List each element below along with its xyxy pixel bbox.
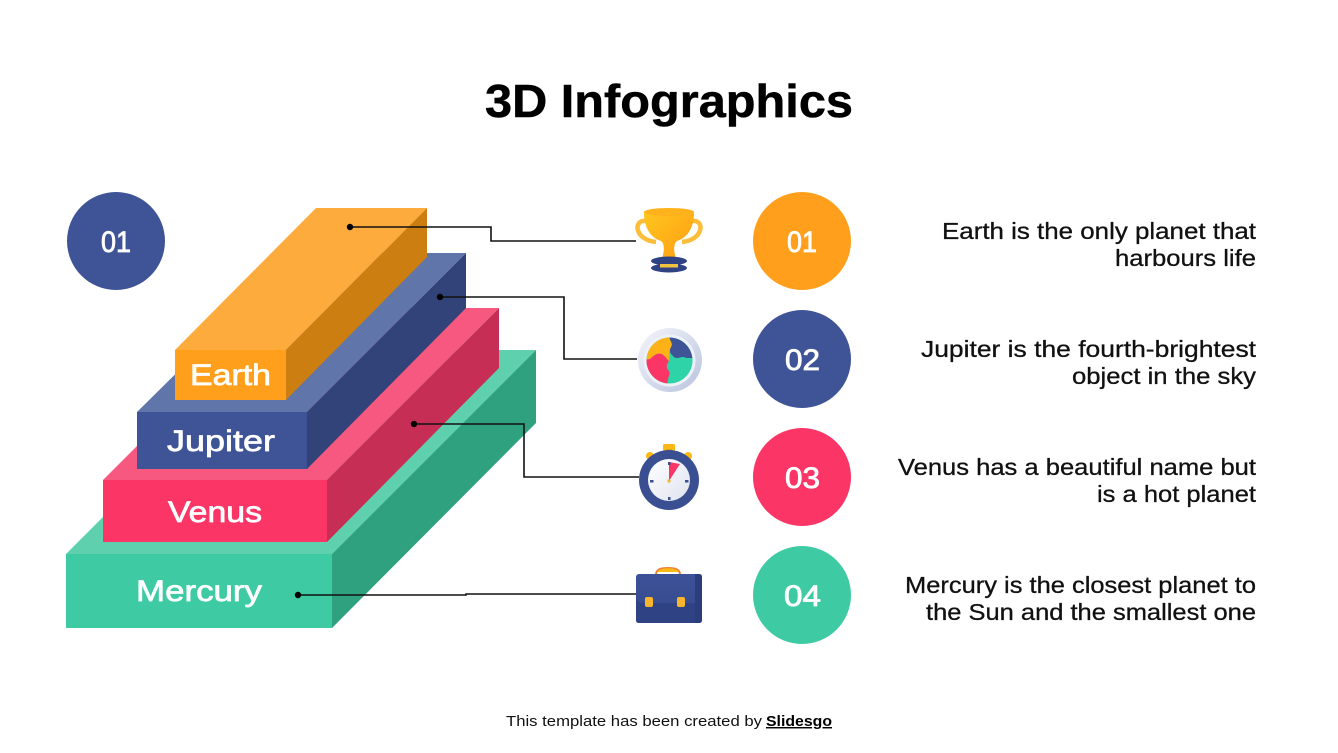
- tier: Earth: Earth: [190, 359, 271, 392]
- badge: 03: [753, 428, 851, 526]
- connector: Mercury: [295, 592, 636, 598]
- 3D stepped pyramid: [66, 208, 536, 628]
- connector: Venus: [411, 421, 639, 477]
- text: Venus description: Venus has a beautiful name but: [898, 454, 1257, 480]
- badge: left 01: [67, 192, 165, 290]
- badge: 03: 03: [785, 462, 820, 495]
- badge: 01: 01: [787, 226, 817, 259]
- text: Mercury description: the Sun and the smallest one: [926, 599, 1256, 625]
- text: Venus description: [898, 454, 1257, 507]
- text: Mercury description: [905, 572, 1256, 625]
- text: Earth description: [942, 218, 1257, 271]
- badge: 01: [753, 192, 851, 290]
- badge: 02: [753, 310, 851, 408]
- icon: puzzle: [638, 328, 702, 392]
- tier: Jupiter: Jupiter: [167, 425, 275, 458]
- text: Jupiter description: object in the sky: [1072, 363, 1256, 389]
- tier: Earth: [175, 208, 427, 400]
- text: Jupiter description: Jupiter is the fourth-brightest: [921, 336, 1257, 362]
- tier: Mercury: Mercury: [136, 575, 262, 608]
- footer credit: [506, 714, 832, 730]
- text: Earth description: harbours life: [1115, 245, 1256, 271]
- text: Venus description: is a hot planet: [1097, 481, 1257, 507]
- icon: briefcase: [636, 568, 702, 623]
- connector: Earth: [347, 224, 636, 241]
- tier: Venus: [103, 308, 499, 542]
- connector: Jupiter: [437, 294, 637, 359]
- icon: trophy: [638, 208, 700, 272]
- badge: left 01: 01: [101, 226, 131, 259]
- badge: 04: [753, 546, 851, 644]
- text: Mercury description: Mercury is the closest planet to: [905, 572, 1256, 598]
- tier: Venus: Venus: [168, 496, 262, 529]
- title: 3D Infographics: [485, 75, 853, 127]
- badge: 02: 02: [785, 344, 820, 377]
- tier: Jupiter: [137, 253, 466, 469]
- footer credit: Slidesgo: [766, 714, 832, 730]
- text: Jupiter description: [921, 336, 1257, 389]
- tier: Mercury: [66, 350, 536, 628]
- footer credit: This template has been created by: [506, 714, 763, 730]
- text: Earth description: Earth is the only planet that: [942, 218, 1257, 244]
- icon: stopwatch: [639, 444, 699, 510]
- badge: 04: 04: [784, 580, 821, 613]
